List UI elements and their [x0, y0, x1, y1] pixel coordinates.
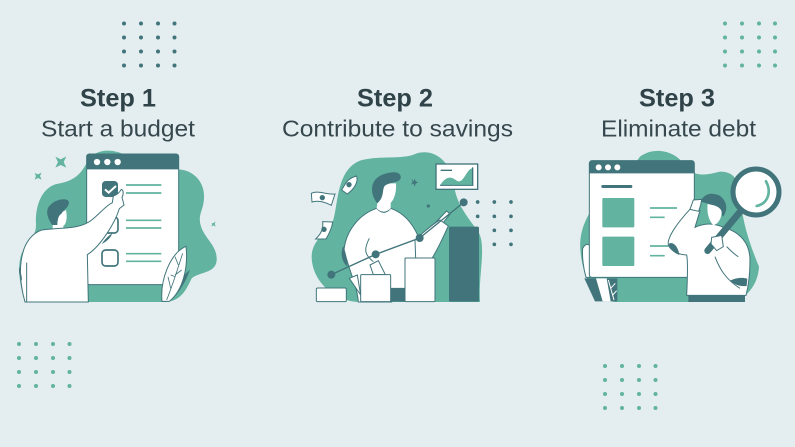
sparkles — [35, 156, 216, 227]
blob background — [19, 151, 217, 302]
illustration: step 1 checklist and person — [19, 151, 217, 302]
magnifying glass — [708, 169, 779, 251]
dot grid: bottom left — [17, 342, 72, 388]
heading: step 2: Contribute to savings — [282, 116, 513, 142]
person — [19, 189, 124, 302]
heading: step 1 — [41, 84, 196, 142]
browser window — [589, 161, 694, 277]
dot grid: top right — [723, 22, 777, 68]
picture frame — [436, 164, 478, 189]
money bills — [311, 176, 357, 239]
heading: step 3: Step 3 — [639, 84, 715, 112]
heading: step 1: Step 1 — [80, 84, 156, 112]
person — [668, 194, 750, 302]
illustration: step 3 window and magnifier — [580, 151, 779, 302]
dot grid: bottom right — [603, 364, 658, 410]
dot grid — [476, 200, 513, 246]
bottom leaves — [582, 244, 617, 301]
heading: step 2 — [282, 84, 513, 142]
heading: step 1: Start a budget — [41, 116, 196, 142]
sparkles — [411, 179, 418, 187]
checklist window — [87, 154, 179, 285]
heading: step 2: Step 2 — [357, 84, 433, 112]
illustration: step 2 savings growth chart — [311, 152, 513, 302]
heading: step 3 — [601, 84, 757, 142]
blob background — [580, 151, 759, 302]
heading: step 3: Eliminate debt — [601, 116, 757, 142]
dot grid: top left — [122, 22, 176, 68]
bars — [316, 227, 479, 302]
trend line — [327, 198, 468, 279]
blob background — [312, 152, 482, 302]
leaf — [162, 246, 190, 301]
person — [342, 172, 450, 302]
